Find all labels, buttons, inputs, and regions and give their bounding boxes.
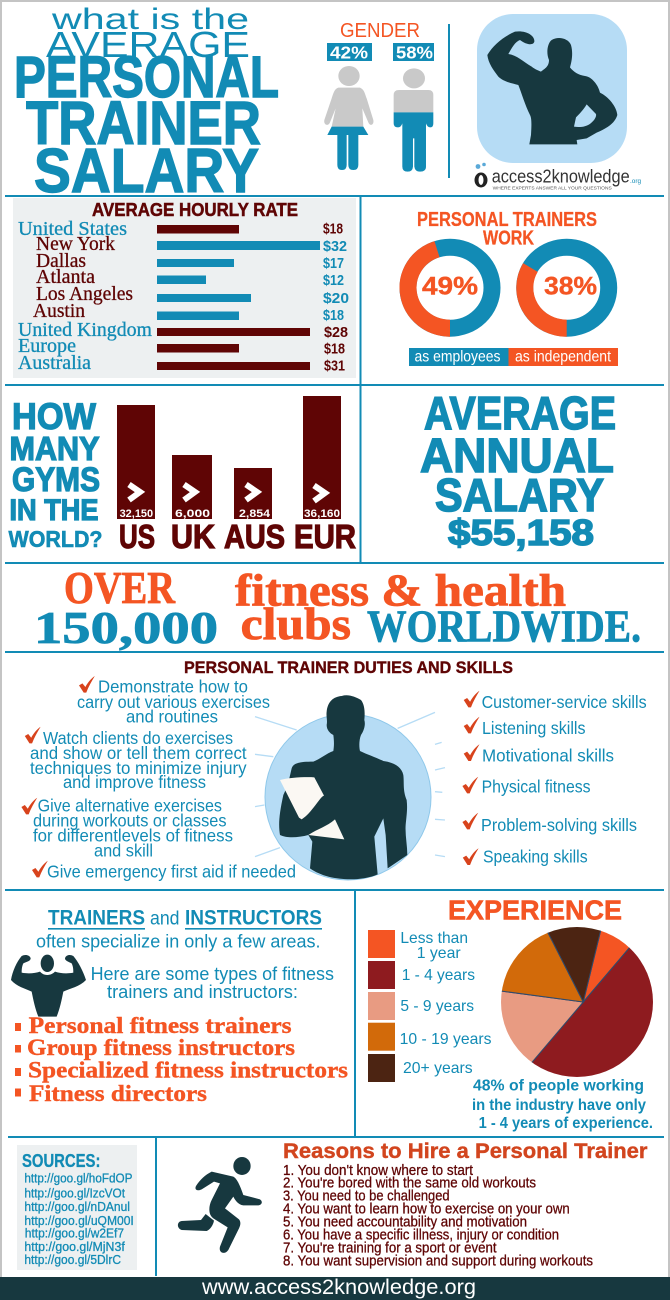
- bar values: $32: [323, 238, 347, 255]
- list: reasons: 3. You need to be challenged: [283, 1188, 450, 1205]
- country labels: UK: [171, 518, 215, 555]
- panel: reasons to hire: [283, 1140, 648, 1270]
- location labels: Austin: [33, 300, 85, 322]
- panel: clubs worldwide: fitness & health: [235, 565, 566, 616]
- location labels: Europe: [18, 335, 76, 357]
- gym counts: 6,000: [175, 508, 210, 520]
- list: duties: [30, 677, 296, 882]
- logo: access2knowledge: [474, 163, 641, 190]
- list: reasons: 2. You're bored with the same old workouts: [283, 1175, 536, 1192]
- bar values: $18: [323, 307, 344, 324]
- gym counts: 32,150: [120, 508, 153, 520]
- illustration: trainer silhouette in circle: [255, 695, 445, 880]
- work heading: PERSONAL TRAINERS: [417, 209, 597, 231]
- bar values: $12: [323, 272, 344, 289]
- location labels: Los Angeles: [36, 283, 133, 305]
- location labels: Atlanta: [36, 266, 95, 288]
- sources heading: SOURCES:: [22, 1151, 100, 1171]
- panel: average annual salary: SALARY: [435, 469, 604, 521]
- footer: www.access2knowledge.org: [201, 1276, 476, 1299]
- list: duties: Demonstrate how to: [98, 677, 248, 697]
- list: trainer types: Group fitness instructors: [27, 1035, 295, 1060]
- bar values: $28: [324, 324, 348, 341]
- panel: clubs worldwide: OVER: [64, 563, 175, 613]
- donut chart: employees 49%: 49%: [422, 272, 478, 300]
- types intro: [91, 964, 334, 1002]
- source links: http://goo.gl/MjN3f: [24, 1239, 125, 1254]
- legend: experience: 1 - 4 years: [402, 967, 475, 984]
- title: [14, 3, 279, 206]
- location labels: Dallas: [36, 250, 86, 272]
- icon: male figure: [394, 68, 433, 172]
- panel: clubs worldwide: clubs: [241, 598, 351, 649]
- list: duties: techniques to minimize injury: [30, 758, 247, 778]
- bar values: $17: [323, 255, 344, 272]
- checkmarks: skills: [462, 691, 480, 865]
- types intro: trainers and instructors:: [107, 982, 298, 1002]
- source links: http://goo.gl/hoFdOP: [24, 1171, 132, 1186]
- location labels: United States: [18, 218, 127, 240]
- bar values: [323, 220, 349, 374]
- panel: gender: [324, 20, 434, 172]
- bar values: $31: [324, 358, 345, 374]
- list: duties: Give alternative exercises: [38, 796, 222, 816]
- work heading: WORK: [483, 228, 534, 250]
- bar values: $18: [323, 220, 343, 238]
- legend: experience: 5 - 9 years: [400, 998, 474, 1015]
- pie chart: experience: [501, 927, 653, 1077]
- list: trainer types: Specialized fitness instructors: [28, 1058, 348, 1083]
- work heading: [417, 209, 597, 250]
- panel: average annual salary: AVERAGE: [424, 387, 616, 439]
- list: skills: Motivational skills: [482, 746, 614, 766]
- gyms heading: MANY: [10, 430, 100, 467]
- icon: female figure: [324, 66, 373, 170]
- trainers heading: [48, 906, 322, 930]
- hourly rate heading: AVERAGE HOURLY RATE: [92, 200, 298, 220]
- list: reasons: 6. You have a specific illness, injury or condition: [283, 1227, 559, 1244]
- list: skills: [481, 692, 647, 867]
- legend: as independent: [515, 349, 611, 366]
- trainers heading: INSTRUCTORS: [185, 906, 322, 929]
- experience caption: [472, 1078, 653, 1132]
- list: duties: and improve fitness: [63, 772, 206, 792]
- trainers heading: and: [150, 908, 180, 929]
- panel: gyms in the world: [8, 396, 356, 555]
- legend: [409, 348, 618, 366]
- panel: average hourly rate: [13, 198, 356, 378]
- country labels: [119, 518, 356, 555]
- intro text: often specialize in only a few areas.: [36, 932, 320, 952]
- source links: [24, 1171, 134, 1267]
- list: trainer types: [15, 1013, 348, 1106]
- list: duties: and routines: [126, 707, 218, 727]
- types intro: Here are some types of fitness: [91, 964, 334, 984]
- list: reasons: [283, 1162, 593, 1270]
- list: reasons: 5. You need accountability and motivation: [283, 1214, 527, 1231]
- panel: experience: [368, 900, 653, 1132]
- location labels: [18, 218, 152, 374]
- legend: experience: Less than: [400, 930, 468, 947]
- source links: http://goo.gl/5DlrC: [24, 1252, 121, 1267]
- panel: duties and skills: [21, 658, 647, 882]
- list: duties: and show or tell them correct: [30, 743, 247, 763]
- gym counts: [120, 508, 340, 520]
- list: skills: Speaking skills: [483, 847, 588, 867]
- panel: trainers and instructors: [11, 906, 348, 1106]
- legend: experience: 10 - 19 years: [400, 1031, 492, 1048]
- title: SALARY: [34, 137, 259, 206]
- list: duties: and skill: [94, 841, 153, 861]
- title: AVERAGE: [46, 24, 250, 65]
- footer: [0, 1276, 670, 1300]
- female percentage: 42%: [330, 42, 368, 62]
- list: reasons: 8. You want supervision and support during workouts: [283, 1253, 593, 1270]
- gyms heading: GYMS: [12, 461, 100, 499]
- gyms heading: HOW: [12, 396, 96, 437]
- title: PERSONAL: [14, 45, 279, 110]
- title: TRAINER: [26, 89, 261, 157]
- logo: access2knowledge: WHERE EXPERTS ANSWER ALL YOUR QUESTIONS: [493, 186, 612, 190]
- list: reasons: 4. You want to learn how to exercise on your own: [283, 1201, 570, 1218]
- source links: http://goo.gl/uQM00I: [24, 1213, 134, 1228]
- country labels: AUS: [224, 518, 285, 555]
- source links: http://goo.gl/IzcVOt: [24, 1185, 125, 1200]
- icon: bodybuilder badge: [477, 14, 627, 163]
- bar values: $20: [323, 290, 349, 307]
- donut chart: independent 38%: [525, 247, 609, 328]
- checkmarks: duties: [21, 676, 95, 877]
- gym counts: 2,854: [239, 508, 271, 520]
- list: duties: Watch clients do exercises: [43, 728, 233, 748]
- gym counts: 36,160: [304, 508, 340, 520]
- panel: clubs worldwide: 150,000: [34, 602, 218, 653]
- panel: personal trainers work: [408, 209, 618, 366]
- gyms heading: WORLD?: [8, 526, 102, 552]
- list: duties: for differentlevels of fitness: [33, 826, 233, 846]
- location labels: Australia: [18, 352, 91, 374]
- chevrons: [129, 484, 325, 501]
- legend: as employees: [414, 349, 500, 366]
- list: reasons: 1. You don't know where to start: [283, 1162, 474, 1179]
- list: duties: during workouts or classes: [33, 811, 227, 831]
- list: duties: carry out various exercises: [77, 692, 270, 712]
- legend: experience: 20+ years: [403, 1060, 473, 1077]
- gyms heading: IN THE: [10, 494, 98, 527]
- experience caption: in the industry have only: [472, 1097, 646, 1114]
- list: skills: Listening skills: [482, 718, 586, 738]
- list: skills: Customer-service skills: [482, 692, 647, 712]
- country labels: EUR: [294, 518, 356, 555]
- location labels: United Kingdom: [18, 319, 152, 341]
- panel: average annual salary: [420, 387, 616, 553]
- bar chart: gyms: [117, 396, 341, 520]
- list: reasons: 7. You're training for a sport or event: [283, 1240, 497, 1257]
- male percentage: 58%: [396, 42, 433, 62]
- icon: muscle man: [11, 955, 86, 1017]
- legend: experience: [368, 930, 492, 1082]
- icon: running figure: [178, 1157, 262, 1253]
- legend: experience: 1 year: [417, 945, 461, 962]
- experience caption: 1 - 4 years of experience.: [479, 1115, 653, 1132]
- bar values: $18: [324, 340, 345, 358]
- list: skills: Physical fitness: [482, 777, 591, 797]
- logo: access2knowledge: access2knowledge: [492, 167, 630, 187]
- country labels: US: [119, 518, 155, 555]
- duties heading: PERSONAL TRAINER DUTIES AND SKILLS: [184, 658, 513, 677]
- logo: access2knowledge: .org: [630, 178, 641, 185]
- list: trainer types: Personal fitness trainers: [29, 1013, 292, 1038]
- list: duties: Give emergency first aid if needed: [47, 862, 296, 882]
- gyms heading: [8, 396, 102, 552]
- source links: http://goo.gl/w2Ef7: [25, 1226, 124, 1241]
- panel: clubs worldwide: [34, 563, 641, 653]
- location labels: New York: [36, 233, 115, 255]
- panel: average annual salary: $55,158: [448, 512, 594, 553]
- list: skills: Problem-solving skills: [481, 815, 637, 835]
- gender heading: GENDER: [340, 20, 420, 42]
- experience caption: 48% of people working: [473, 1078, 644, 1095]
- bar chart: hourly rate: [157, 225, 320, 370]
- title: what is the: [51, 3, 249, 36]
- reasons heading: Reasons to Hire a Personal Trainer: [283, 1140, 648, 1163]
- panel: sources: [17, 1145, 137, 1270]
- panel: average annual salary: ANNUAL: [420, 430, 614, 483]
- trainers heading: TRAINERS: [48, 906, 145, 929]
- donut chart: independent 38%: 38%: [544, 272, 597, 300]
- donut chart: employees 49%: [408, 247, 492, 328]
- experience heading: EXPERIENCE: [448, 894, 622, 925]
- source links: http://goo.gl/nDAnul: [24, 1199, 130, 1214]
- list: trainer types: Fitness directors: [29, 1081, 207, 1106]
